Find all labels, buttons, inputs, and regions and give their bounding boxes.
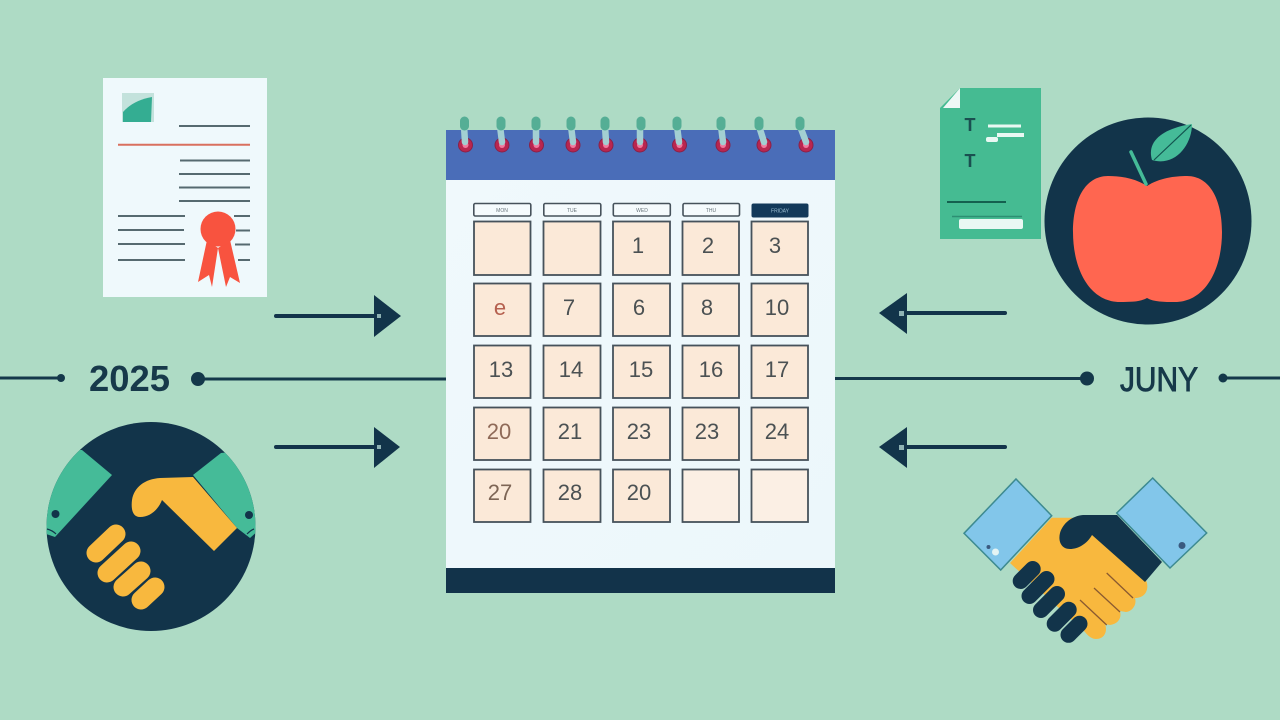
document letters: T [964,151,976,171]
document letters [964,115,976,171]
day numbers: 14 [559,357,583,382]
day numbers: 23 [695,419,719,444]
green document [940,88,1041,239]
label: month: JUNY [1120,361,1198,399]
day numbers: 2 [702,233,714,258]
arrow: top left [274,295,401,337]
weekday headers: THU [706,208,717,214]
day numbers: 10 [765,295,789,320]
day numbers: 28 [558,480,582,505]
yellow hand [1010,518,1147,639]
weekday headers: MON [496,208,508,214]
certificate document [103,78,267,297]
timeline right [834,372,1280,386]
document sheet [940,88,1041,239]
weekday headers [474,204,808,218]
day numbers: 23 [627,419,651,444]
right cuff [193,452,256,538]
calendar [446,121,835,593]
hand and thumb [132,477,237,551]
day numbers: 7 [563,295,575,320]
certificate logo [122,93,154,122]
certificate text lines [118,126,250,260]
left cuff [46,450,112,537]
weekday headers: FRIDAY [771,208,790,214]
day numbers: 1 [632,233,644,258]
calendar footer band [446,568,835,593]
day numbers: 20 [487,419,511,444]
apple leaf [1151,124,1192,161]
day numbers: 17 [765,357,789,382]
document letters: T [964,115,976,135]
weekday headers: TUE [567,208,578,214]
apple stem [1131,152,1146,184]
cuff marks [47,529,254,534]
dark fingers [1021,569,1080,635]
spiral rings [458,121,813,152]
folded corner [943,88,960,108]
calendar page [446,130,835,593]
arrow: top right [879,293,1007,334]
day numbers: 24 [765,419,789,444]
certificate sheet [103,78,267,297]
right cuff [1117,478,1207,568]
day numbers: 21 [558,419,582,444]
arrow: bottom right [879,427,1007,468]
day numbers: 15 [629,357,653,382]
fingers [96,534,155,600]
day numbers [487,233,789,505]
arrow: bottom left [274,427,400,468]
certificate seal [198,212,240,287]
calendar header band [446,130,835,180]
badge circle [1044,118,1252,324]
day numbers: 20 [627,480,651,505]
document white lines [959,124,1024,229]
handshake badge [46,422,256,631]
weekday headers: WED [636,208,648,214]
finger creases [1080,573,1133,625]
day numbers: 3 [769,233,781,258]
day numbers: e [494,295,506,320]
apple [1073,176,1222,302]
cuff buttons [52,510,253,519]
label: year: 2025 [89,358,170,399]
left cuff [964,479,1052,570]
document dark lines [947,202,1022,216]
timeline left [0,372,446,386]
day numbers: 27 [488,480,512,505]
dark hand and thumb [1059,515,1162,582]
day numbers: 8 [701,295,713,320]
day numbers: 16 [699,357,723,382]
cuff buttons [986,542,1186,556]
handshake icon [964,478,1207,639]
apple badge [1044,118,1252,324]
day numbers: 13 [489,357,513,382]
day cells [474,222,808,522]
day numbers: 6 [633,295,645,320]
badge circle [46,422,256,631]
